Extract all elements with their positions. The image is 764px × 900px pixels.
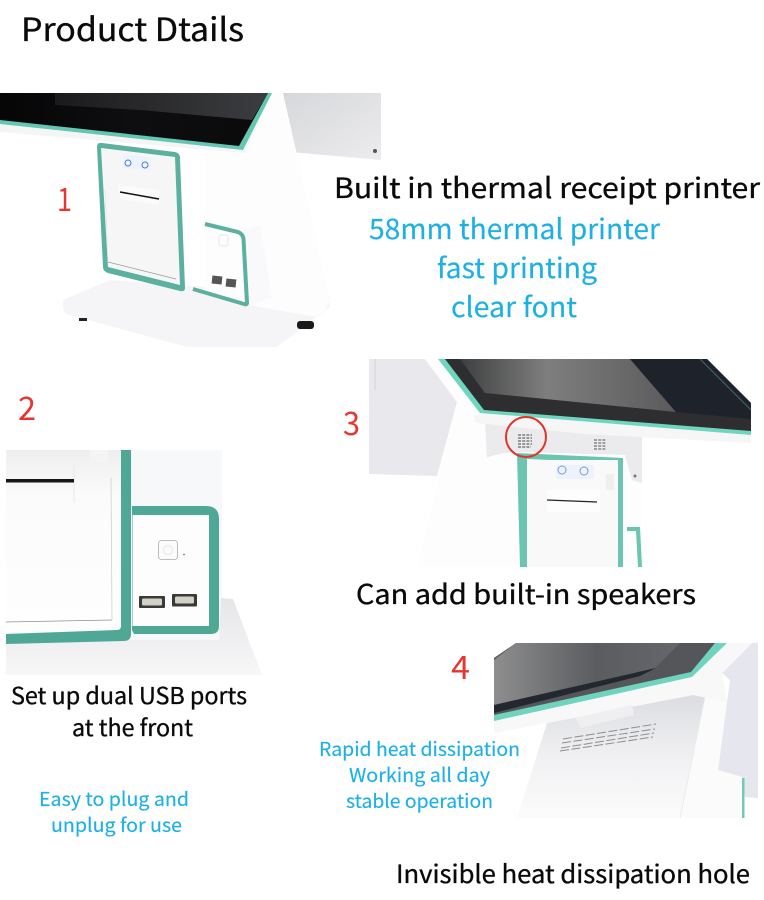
speaker grille left	[518, 435, 532, 447]
text block: easy to plug: unplug for use	[51, 811, 182, 838]
base plate	[6, 598, 262, 675]
text block: printer features: fast printing	[437, 247, 597, 287]
caption: dual USB ports: Set up dual USB ports	[11, 677, 247, 711]
USB ports	[139, 594, 197, 608]
bezel underside	[474, 413, 751, 443]
text block: heat dissipation benefits: Rapid heat dissipation	[319, 735, 520, 762]
USB module edge	[627, 527, 642, 567]
text block: heat dissipation benefits	[319, 735, 520, 814]
title: Product Dtails	[21, 5, 244, 51]
panel: thermal printer photo	[0, 93, 381, 347]
lower accent edge	[742, 778, 744, 818]
stand leg	[680, 695, 744, 818]
USB module	[238, 225, 272, 307]
printer module	[517, 453, 623, 567]
number 2: 2	[18, 384, 36, 430]
number 4: 4	[451, 643, 470, 689]
text block: heat dissipation benefits: Working all day	[349, 761, 490, 788]
paper slot	[118, 185, 159, 205]
main body	[517, 695, 705, 818]
panel: heat dissipation photo	[494, 643, 758, 818]
panel: speakers photo	[369, 359, 751, 567]
hinge tab	[575, 705, 634, 728]
red circle highlight	[506, 417, 546, 457]
stand	[417, 359, 642, 567]
paper slot	[6, 479, 74, 482]
caption: dual USB ports: at the front	[72, 709, 193, 743]
text block: easy to plug: Easy to plug and	[39, 785, 189, 812]
number 1: 1	[57, 175, 72, 221]
text block: printer features	[369, 208, 660, 326]
number 3: 3	[343, 399, 360, 445]
text block: heat dissipation benefits: stable operation	[346, 787, 493, 814]
caption: dual USB ports	[11, 677, 247, 743]
printer status label	[556, 465, 594, 479]
text block: easy to plug	[39, 785, 189, 838]
screen	[438, 359, 751, 435]
speaker grille right	[594, 440, 606, 449]
printer cover	[6, 450, 121, 632]
back display panel	[278, 93, 381, 160]
stand leg	[205, 93, 330, 318]
panel: dual USB ports photo	[6, 450, 262, 675]
speaker recess	[485, 423, 642, 483]
caption: heat dissipation hole: Invisible heat dissipation hole	[396, 855, 750, 891]
USB panel	[132, 506, 219, 634]
base plate	[63, 280, 330, 347]
text block: printer features: 58mm thermal printer	[369, 208, 660, 248]
teal frame of printer	[6, 450, 131, 644]
display screen	[0, 93, 272, 153]
screen	[494, 643, 727, 721]
printer status label	[123, 155, 151, 170]
back display panel	[369, 359, 457, 476]
bezel and shoulder	[494, 643, 752, 733]
power button	[158, 540, 185, 560]
text block: printer features: clear font	[451, 286, 577, 326]
printer module	[97, 143, 185, 291]
caption: speakers: Can add built-in speakers	[356, 573, 696, 612]
heat vents	[560, 724, 656, 751]
back display panel	[718, 643, 758, 798]
heading: built in thermal receipt printer: Built in thermal receipt printer	[334, 167, 760, 207]
feet	[79, 318, 87, 321]
